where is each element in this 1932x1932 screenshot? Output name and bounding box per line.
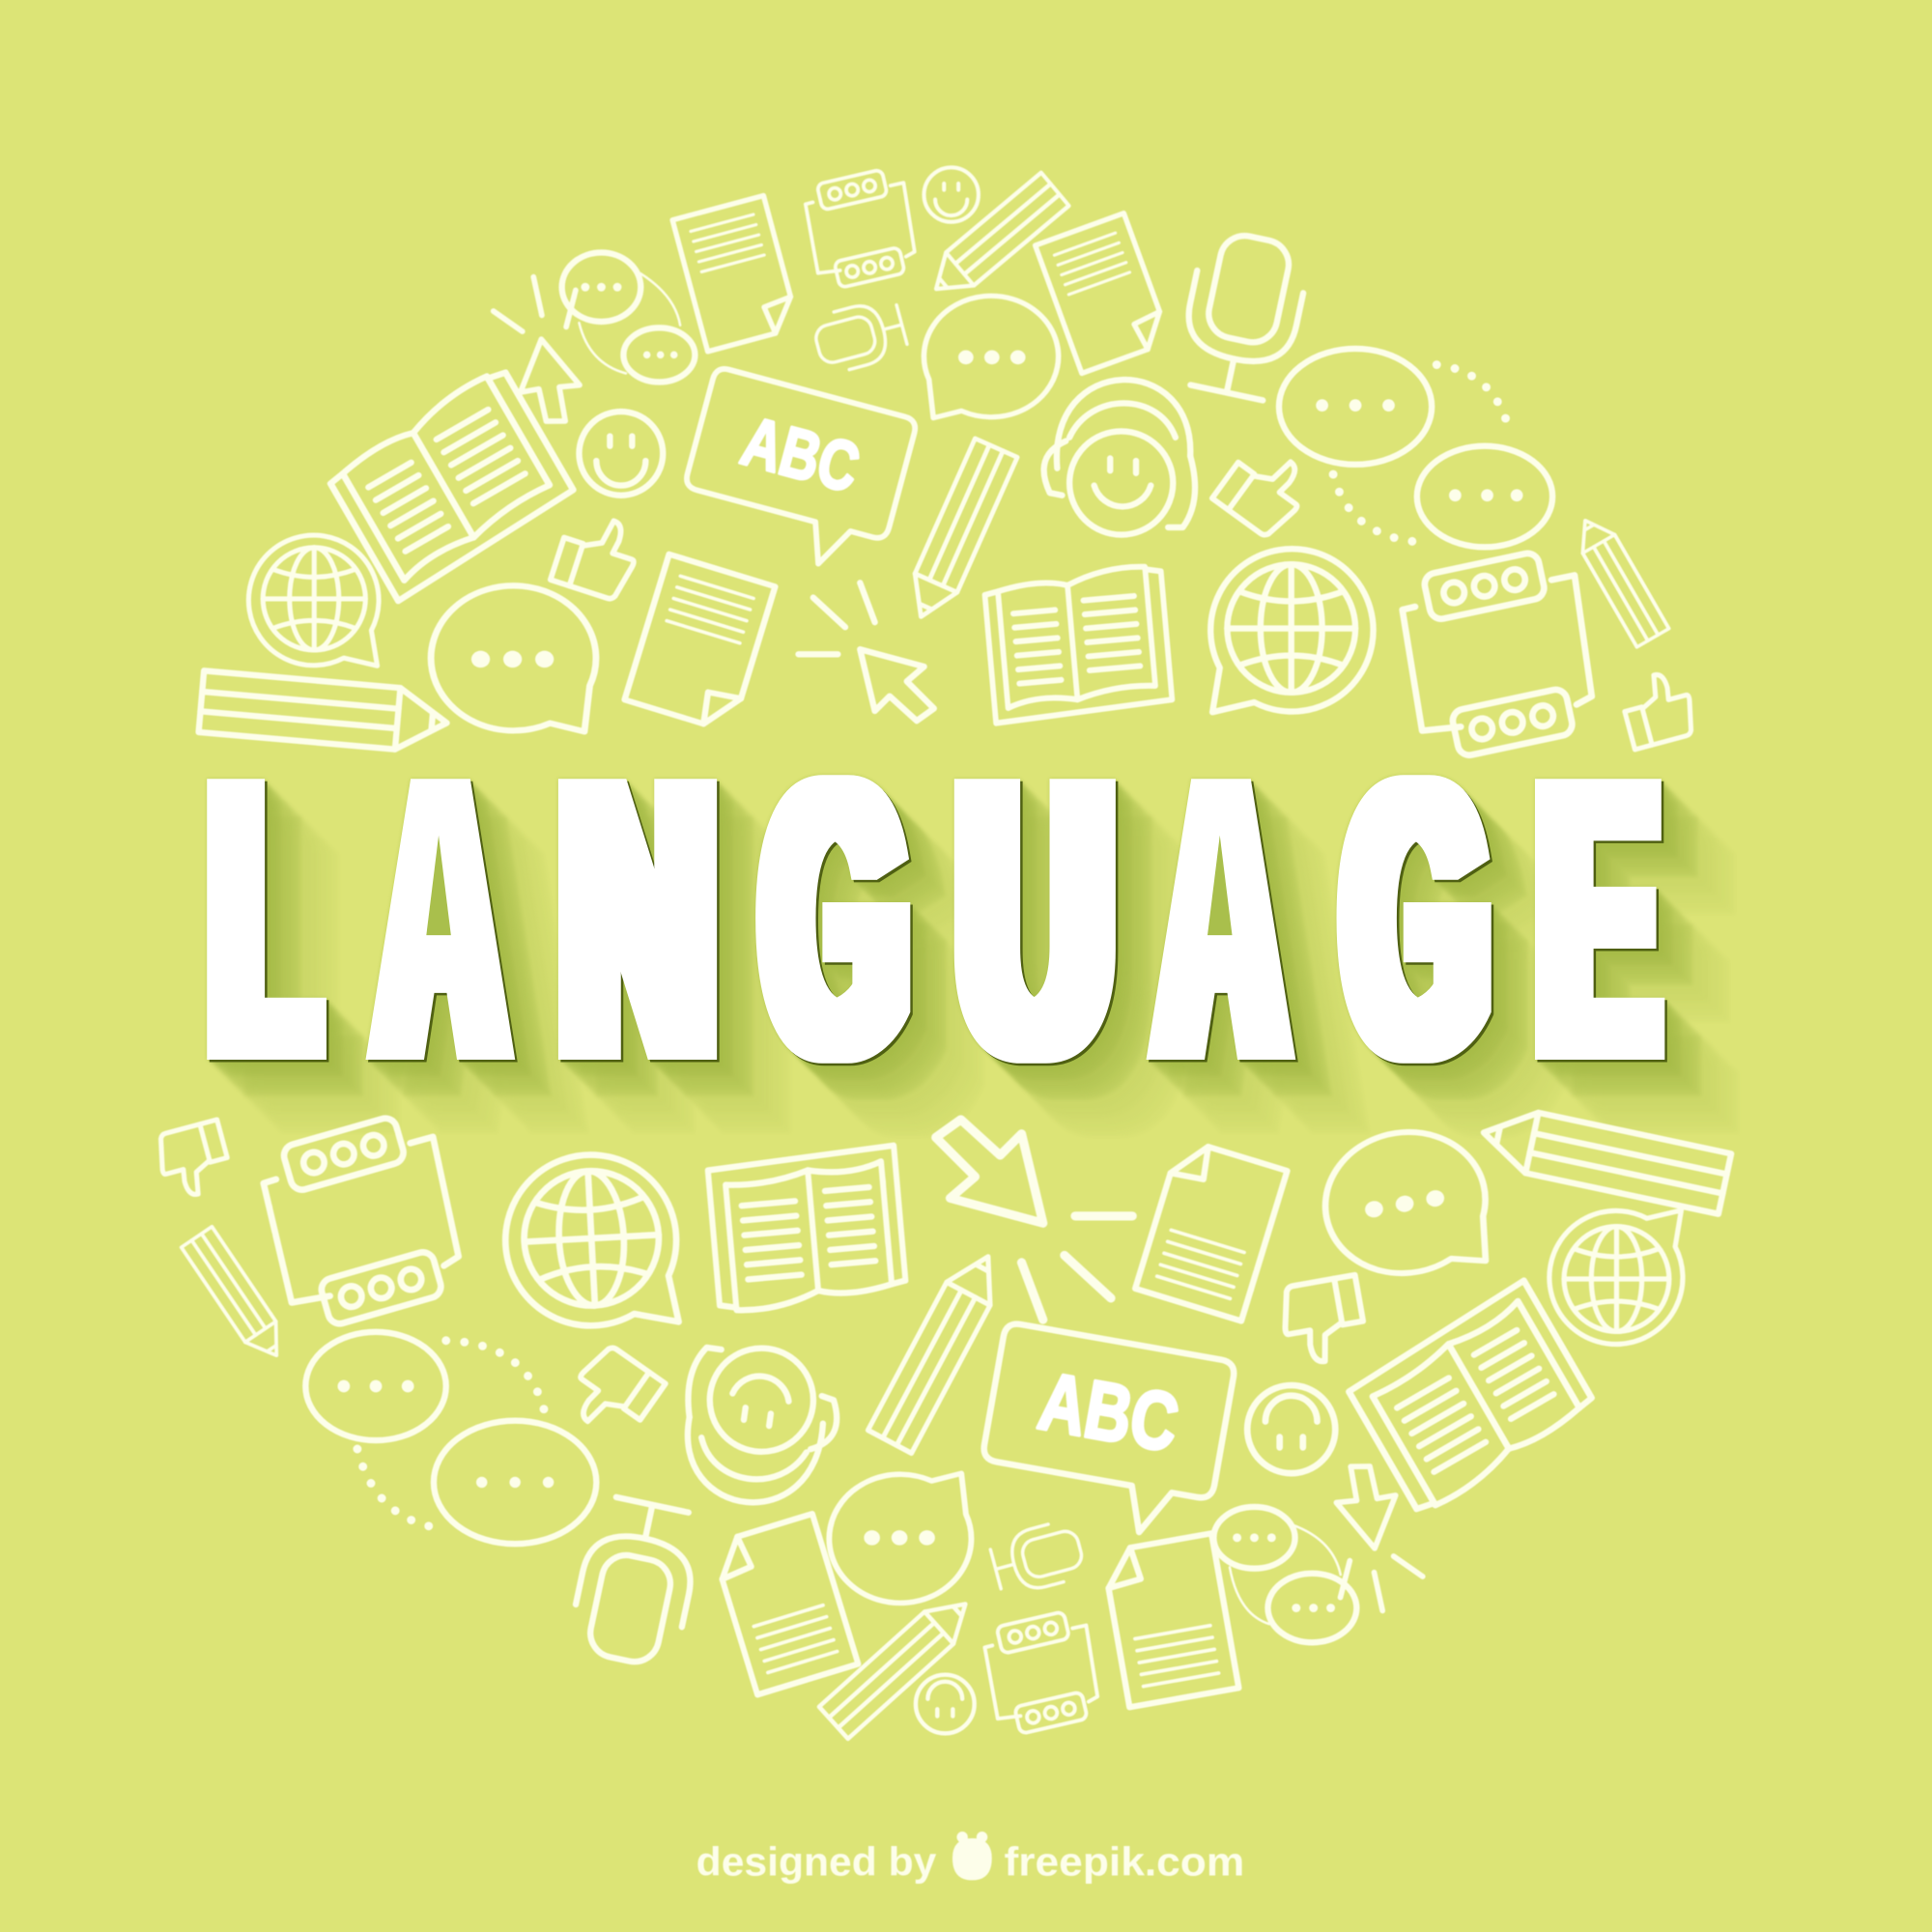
credit text left: designed by	[696, 1838, 937, 1884]
icon: document right	[1135, 1138, 1287, 1321]
ABC label: ABC	[1033, 1355, 1184, 1469]
footer credit	[696, 1832, 1244, 1884]
icon: document top	[672, 195, 799, 352]
icon: speech bubble right	[1314, 1120, 1496, 1287]
icon: open book centre	[983, 564, 1173, 724]
icon: small pencil left	[182, 1227, 292, 1366]
icon: speech bubble left	[431, 585, 596, 731]
ABC label: ABC	[734, 402, 867, 507]
icon: pencil top	[923, 173, 1069, 305]
icon: small chat window	[983, 1610, 1099, 1736]
icon: large open book	[1345, 1281, 1600, 1516]
icon: speech bubble	[923, 296, 1059, 418]
freepik logo icon	[952, 1832, 992, 1880]
icon: chat pair with dotted arcs	[1279, 349, 1552, 547]
icon: document centre	[625, 554, 775, 732]
icon: smile face	[1247, 1385, 1335, 1473]
icon: chat pair with dotted arcs	[305, 1332, 596, 1544]
icon: small smile	[916, 1675, 975, 1733]
icon: smile face	[579, 412, 663, 496]
icon: small cursor	[1286, 1458, 1457, 1630]
icon: document lower right	[1102, 1533, 1238, 1707]
icon: small microphone	[810, 296, 910, 376]
icon: globe bubble	[1210, 549, 1374, 712]
icon: microphone	[1174, 227, 1313, 404]
title: LANGUAGE with long shadow: U	[959, 707, 1110, 1131]
title: LANGUAGE with long shadow: L	[213, 707, 315, 1131]
icon: small globe	[248, 535, 379, 666]
title: LANGUAGE with long shadow: N	[562, 707, 713, 1131]
icon: chat window	[258, 1110, 465, 1332]
icon: cursor with sparks	[936, 1120, 1132, 1320]
title: LANGUAGE with long shadow: A	[1161, 707, 1281, 1131]
icon: small smile	[924, 167, 979, 222]
icon: large open book	[323, 366, 578, 601]
icon: small globe right	[1549, 1210, 1683, 1344]
credit text right: freepik.com	[1005, 1838, 1244, 1884]
icon: open book	[707, 1146, 907, 1313]
icon: speech bubble lower	[829, 1473, 971, 1603]
icon: small thumbs up	[1618, 668, 1698, 750]
icon: small chat pair	[562, 252, 695, 382]
title: LANGUAGE with long shadow: G	[765, 707, 904, 1131]
icon: cursor with sparks	[799, 582, 934, 721]
icon: small cursor	[459, 259, 630, 430]
icon: document lower	[712, 1514, 858, 1694]
icon: globe bubble	[501, 1151, 681, 1330]
icon: thumbs down	[561, 1341, 666, 1445]
title letter counters: both A triangles	[426, 836, 1233, 935]
icon: pencil right	[1477, 1102, 1731, 1214]
icon: pencil centre	[868, 1245, 1009, 1453]
title: LANGUAGE with long shadow: G	[1347, 707, 1485, 1131]
icon cluster: upper half	[199, 167, 1698, 759]
icon: pencil left	[199, 670, 449, 753]
icon: pencil lower	[819, 1588, 980, 1739]
icon: document right	[1036, 213, 1171, 373]
icon: pencil centre	[900, 439, 1017, 626]
icon: smile with headset	[1044, 380, 1195, 535]
icon: small thumb	[154, 1120, 235, 1202]
icon: thumbs down right	[1278, 1275, 1369, 1367]
icon: small microphone	[988, 1518, 1087, 1598]
title: LANGUAGE with long shadow: E	[1541, 706, 1655, 1131]
icon: ABC speech bubble	[673, 366, 918, 579]
icon: microphone lower	[567, 1493, 705, 1670]
icon: chat window	[1401, 550, 1594, 759]
icon: thumbs up tilted	[1212, 438, 1317, 542]
icon: thumbs up	[551, 508, 644, 603]
icon: headset face inverted	[674, 1339, 845, 1513]
icon: small chat pair	[1213, 1507, 1356, 1642]
icon cluster: lower half	[154, 1102, 1731, 1739]
title: LANGUAGE with long shadow: A	[381, 707, 500, 1131]
title: LANGUAGE with long shadow	[213, 706, 1655, 1131]
icon: small pencil right	[1569, 511, 1669, 647]
icon: chat window small	[804, 168, 917, 290]
icon: ABC speech bubble	[974, 1321, 1236, 1544]
